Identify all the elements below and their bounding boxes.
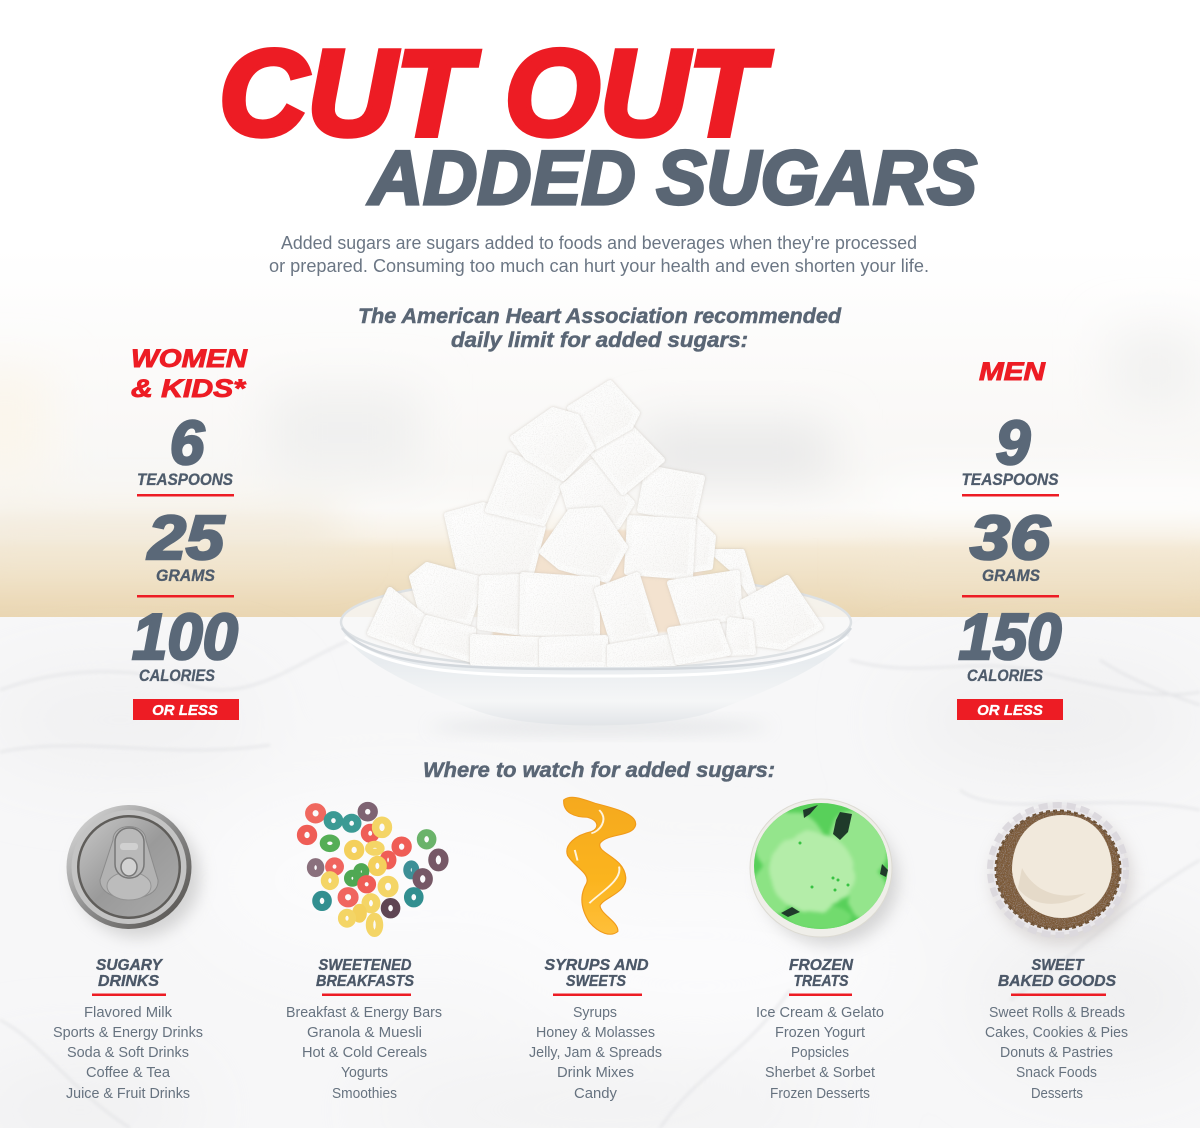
subheading: daily limit: daily limit for added sugars: <box>451 329 748 352</box>
plate shadow <box>430 720 770 734</box>
category list: Frozen Desserts <box>770 1085 870 1102</box>
stat: 36 grams: GRAMS <box>982 567 1040 585</box>
category list <box>756 1004 884 1102</box>
category list <box>985 1004 1128 1102</box>
stat: 6 teaspoons: 6 <box>170 409 205 478</box>
stat: 150 calories: CALORIES <box>967 667 1043 685</box>
stat: 100 calories: CALORIES <box>139 667 215 685</box>
category list: Sports & Energy Drinks <box>53 1024 203 1041</box>
category heading: SUGARY <box>96 957 163 974</box>
category heading: BREAKFASTS <box>316 973 414 990</box>
category list: Hot & Cold Cereals <box>302 1044 427 1061</box>
category list: Yogurts <box>341 1064 388 1081</box>
category list: Ice Cream & Gelato <box>756 1004 884 1021</box>
category: frozen treats <box>750 799 898 1102</box>
stat: 9 teaspoons: 9 <box>996 409 1031 478</box>
title line: cut out: CUT OUT <box>219 25 773 161</box>
badge: or less: OR LESS <box>977 702 1043 719</box>
stat: 25 grams <box>137 504 234 598</box>
category list: Frozen Yogurt <box>775 1024 866 1041</box>
women and kids column <box>131 345 248 720</box>
category list: Candy <box>574 1085 617 1102</box>
category list: Juice & Fruit Drinks <box>66 1085 190 1102</box>
stat: 36 grams: 36 <box>970 504 1051 573</box>
icon: frosted cupcake <box>990 805 1132 944</box>
category list: Breakfast & Energy Bars <box>286 1004 442 1021</box>
stat: 36 grams <box>962 504 1059 598</box>
category heading: BAKED GOODS <box>998 973 1116 990</box>
category heading: TREATS <box>794 973 849 990</box>
category: sweet baked goods <box>985 805 1132 1102</box>
icon: mint ice cream cup <box>750 799 898 945</box>
category list: Sweet Rolls & Breads <box>989 1004 1125 1021</box>
marble mottling <box>0 675 1200 1128</box>
category list <box>529 1004 662 1102</box>
men column <box>957 358 1063 720</box>
title line: added sugars: ADDED SUGARS <box>367 136 977 221</box>
stat: 6 teaspoons: TEASPOONS <box>137 471 233 489</box>
category list: Cakes, Cookies & Pies <box>985 1024 1128 1041</box>
stat: 25 grams: 25 <box>147 504 226 573</box>
category: sweetened breakfasts <box>286 805 445 1102</box>
category heading: SWEETS <box>566 973 626 990</box>
plate back rim <box>341 575 851 669</box>
category list: Flavored Milk <box>84 1004 172 1021</box>
intro paragraph: Added sugars are sugars added to foods and beverages when they're processed <box>281 233 917 253</box>
stat: 100 calories: 100 <box>132 600 238 673</box>
badge: or less <box>957 699 1063 720</box>
badge: or less <box>133 699 239 720</box>
category list: Sherbet & Sorbet <box>765 1064 876 1081</box>
title <box>219 25 977 221</box>
category heading: FROZEN <box>789 957 853 974</box>
stat: 9 teaspoons: TEASPOONS <box>962 471 1058 489</box>
category list: Smoothies <box>332 1085 397 1102</box>
category heading: DRINKS <box>98 973 159 990</box>
warm shadow behind cubes <box>490 530 720 640</box>
category list: Popsicles <box>791 1044 849 1061</box>
heading: men: MEN <box>979 358 1046 386</box>
stat: 9 teaspoons <box>962 409 1059 496</box>
category list <box>286 1004 442 1102</box>
category list: Drink Mixes <box>557 1064 634 1081</box>
icon: fruit cereal rings <box>301 805 445 934</box>
category heading: SWEETENED <box>318 957 412 974</box>
category list: Syrups <box>573 1004 617 1021</box>
category list: Honey & Molasses <box>536 1024 655 1041</box>
category heading: SYRUPS AND <box>544 957 649 974</box>
category heading: SWEET <box>1032 957 1085 974</box>
heading: women and kids: & KIDS* <box>131 375 247 403</box>
intro paragraph <box>269 233 929 276</box>
sugar cubes <box>370 383 820 665</box>
heading: women and kids: WOMEN <box>131 345 248 373</box>
category: sugary drinks <box>53 805 203 1102</box>
marble veins <box>0 640 1200 1128</box>
plate bowl <box>342 628 851 726</box>
category list: Granola & Muesli <box>307 1024 422 1041</box>
stat: 6 teaspoons <box>137 409 234 496</box>
category: syrups and sweets <box>529 797 662 1102</box>
icon: syrup drizzle <box>564 797 636 934</box>
plate front rim <box>342 628 851 669</box>
icon: soda can top <box>66 805 200 937</box>
plate of sugar cubes <box>341 383 851 734</box>
stat: 150 calories: 150 <box>958 600 1062 673</box>
category list: Jelly, Jam & Spreads <box>529 1044 662 1061</box>
category list: Desserts <box>1031 1085 1083 1102</box>
subheading: where to watch: Where to watch for added sugars: <box>423 759 775 782</box>
category list: Coffee & Tea <box>86 1064 171 1081</box>
intro paragraph: or prepared. Consuming too much can hurt your health and even shorten your life. <box>269 256 929 276</box>
category list: Donuts & Pastries <box>1000 1044 1113 1061</box>
stat: 25 grams: GRAMS <box>156 567 215 585</box>
badge: or less: OR LESS <box>152 702 218 719</box>
subheading: daily limit: The American Heart Association recommended <box>358 305 842 328</box>
ice cream flecks and cookie pieces <box>781 805 888 917</box>
subheading: daily limit <box>358 305 842 352</box>
category list: Soda & Soft Drinks <box>67 1044 189 1061</box>
category list <box>53 1004 203 1102</box>
category list: Snack Foods <box>1016 1064 1097 1081</box>
